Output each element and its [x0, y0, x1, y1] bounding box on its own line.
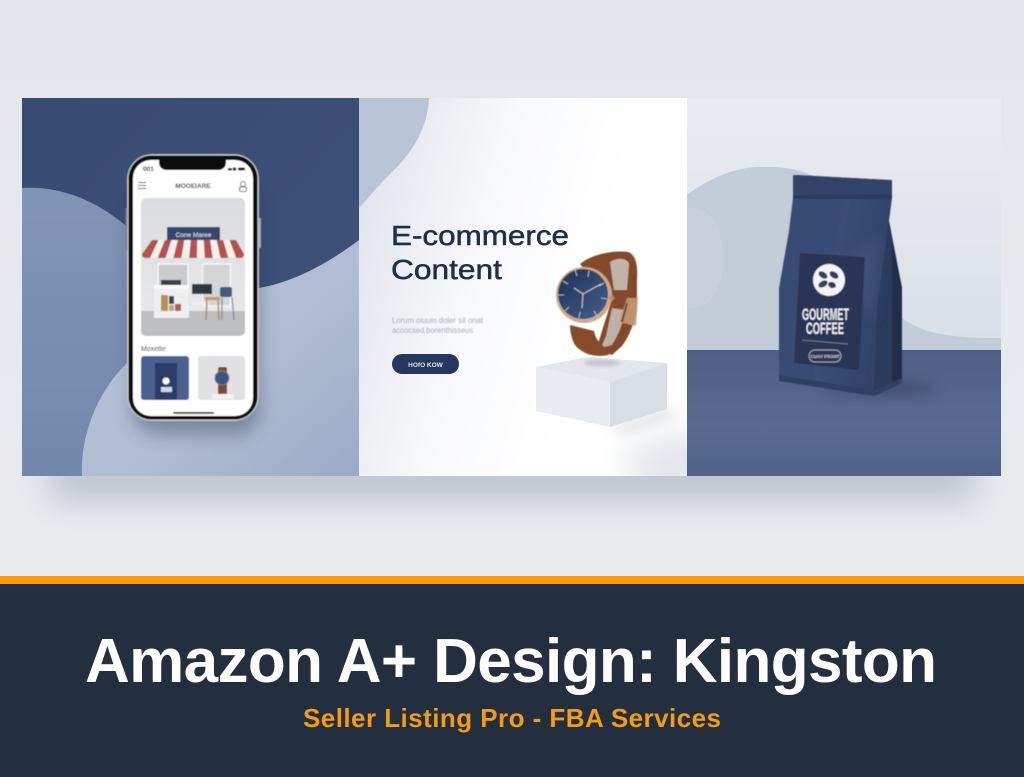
- body text: acoocsed borenthisseus: [392, 326, 473, 335]
- shelves: [154, 264, 234, 320]
- back strap bottom: [596, 296, 637, 355]
- section label: Moxette: [141, 346, 166, 353]
- status bar: 001: [143, 166, 154, 173]
- button: [392, 354, 459, 374]
- floor: [687, 350, 1001, 476]
- bag label: CUAV FRONT: [810, 354, 840, 359]
- app header: [138, 182, 146, 189]
- notch: [159, 159, 226, 170]
- banner shadow: [50, 445, 975, 503]
- icon: smartphone: MOOEIARE: [175, 183, 211, 190]
- footer bar: [0, 576, 1024, 777]
- button: HOfO KOW: [408, 362, 444, 369]
- title: Amazon A+ Design: Kingston: [85, 627, 937, 696]
- store sign: [167, 227, 220, 241]
- case and dial: [556, 267, 612, 323]
- heading: [392, 226, 568, 280]
- bag label: GOURMET: [802, 306, 849, 324]
- plinth: [536, 357, 680, 434]
- body text: [392, 316, 484, 334]
- buckle: [619, 298, 638, 326]
- heading: E-commerce: [391, 220, 569, 251]
- store image card: [141, 198, 245, 336]
- icon: smartphone: [126, 154, 261, 421]
- store image card: Cone Maree: [176, 232, 212, 239]
- body text: Lorum oiuuin doler sit onat: [392, 316, 484, 325]
- front strap: [570, 325, 613, 356]
- panel: phone storefront: [22, 98, 359, 476]
- product thumbnail: coffee: [141, 356, 189, 400]
- phone shadow: [123, 251, 269, 444]
- product thumbnail: watch: [198, 356, 245, 400]
- subtitle: Seller Listing Pro - FBA Services: [303, 703, 721, 733]
- awning: [142, 240, 244, 258]
- bag label: [794, 253, 865, 370]
- panel: e-commerce content: [359, 98, 687, 476]
- icon: coffee bag: [779, 175, 902, 396]
- bag shadow: [825, 380, 935, 396]
- heading: Content: [391, 254, 502, 285]
- bag label: COFFEE: [806, 320, 844, 338]
- back strap top: [580, 252, 637, 302]
- panel: coffee product: [687, 166, 1001, 476]
- icon: wristwatch: [556, 252, 638, 366]
- home indicator: [173, 412, 214, 414]
